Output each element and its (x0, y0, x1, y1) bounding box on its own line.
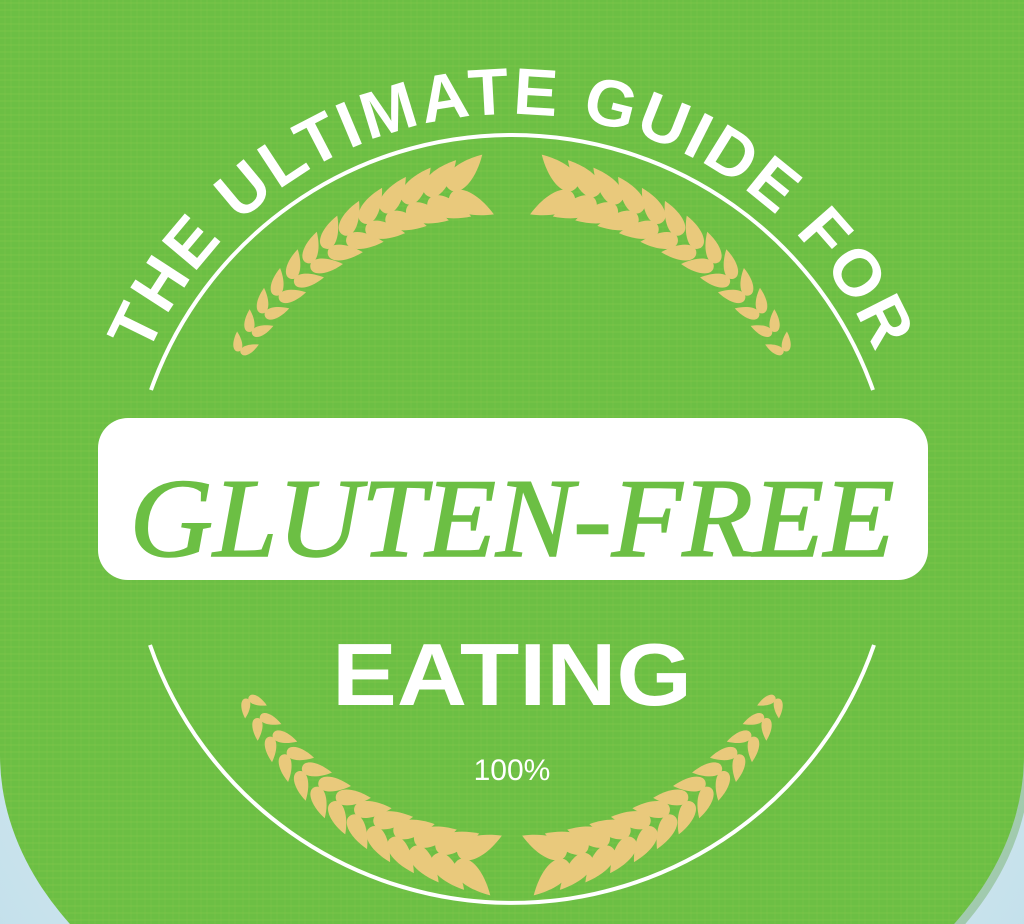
wheat: top-left stalk (224, 145, 502, 363)
curved title: THE ULTIMATE GUIDE FOR: THE ULTIMATE GUIDE FOR (106, 68, 910, 351)
wheat: bottom-right stalk (514, 687, 792, 905)
wheat: bottom-left stalk (232, 687, 510, 905)
wheat: top-right stalk (522, 145, 800, 363)
EATING: EATING (332, 625, 692, 724)
banner text: GLUTEN-FREE: GLUTEN-FREE (130, 457, 894, 581)
white banner (98, 418, 928, 581)
100%: 100% (474, 754, 550, 787)
ring outline (150, 135, 874, 903)
